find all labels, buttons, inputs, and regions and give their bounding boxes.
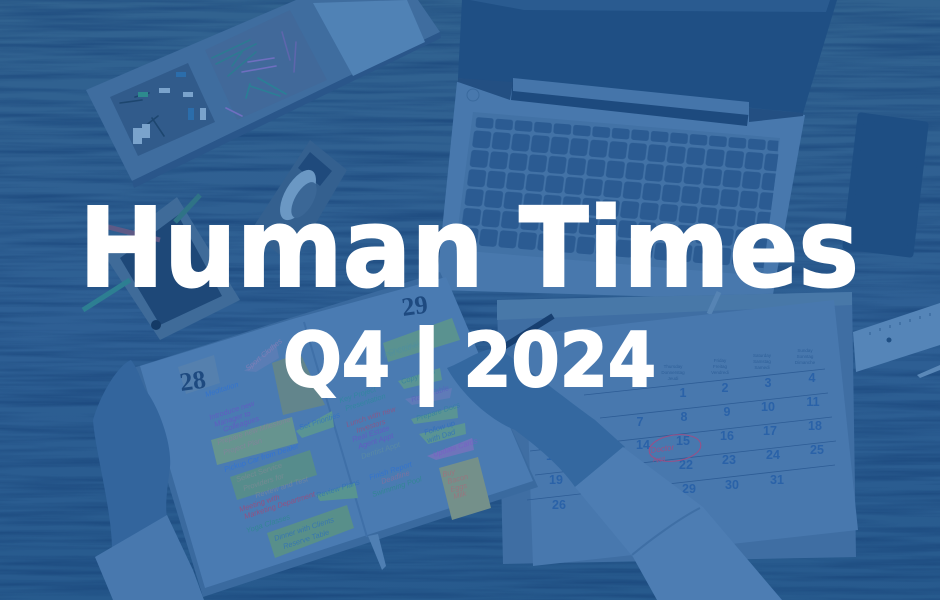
calendar backing pad [497,292,856,564]
calendar dates: 4 [809,371,816,385]
handwritten planner entries: Review Plans [315,477,361,500]
calendar dates: 11 [806,395,820,409]
handwritten planner entries: Chemical [387,339,420,357]
wall calendar page [525,300,858,566]
calendar weekday labels: Thursday [664,364,683,369]
subtitle: Q4 | 2024 [283,316,656,404]
laptop screen [458,0,837,113]
handwritten planner entries: Yoga Classes [245,512,291,535]
calendar weekday labels [661,348,816,381]
handwritten planner entries: Colleagues [222,414,261,434]
calendar weekday labels: Samedi [754,365,770,370]
handwritten planner entries: Meditation [204,380,240,399]
smartphone [846,116,925,254]
calendar dates: 2 [722,381,729,395]
pencils [83,280,130,310]
right hand with pen [447,316,625,487]
handwritten planner entries: Finish Report [368,459,414,482]
handwritten planner entries: Dinner with Clients [273,515,335,543]
calendar dates: 24 [766,448,780,462]
handwritten planner entries: Introduce new [208,399,256,422]
handwritten planner entries: Marketing Department [243,489,317,521]
calendar dates: 22 [679,458,693,472]
handwritten planner entries: with Dad [426,427,457,445]
handwritten planner entries: Update Cards [432,436,479,459]
handwritten planner entries: Real Estate [351,423,391,444]
handwritten planner entries: Investors [355,417,387,435]
calendar weekday labels: Donnerstag [661,370,685,375]
right shirt sleeve [575,447,782,600]
handwritten planner entries: Manager to [213,409,252,429]
calendar dates: 16 [720,429,734,443]
handwritten planner entries: Project Plan [222,436,263,457]
note paper in tray [313,0,425,76]
handwritten planner entries: Bacon [446,472,469,486]
calendar dates: 14 [636,438,650,452]
handwritten planner entries: Meeting with [238,492,281,514]
calendar dates: 23 [722,453,736,467]
laptop base [436,82,805,300]
calendar dates: 8 [681,410,688,424]
calendar dates: 17 [763,424,777,438]
handwritten planner entries: Review and Test [254,474,310,500]
pencil holder [83,195,240,340]
calendar weekday labels: Friday [714,358,727,363]
calendar dates [546,371,824,512]
calendar weekday labels: Jeudi [668,376,678,381]
handwritten planner entries: Sport Clothes [244,336,284,373]
handwritten planner entries: Dentist Appt [360,440,402,461]
open planner [133,272,538,597]
handwritten planner entries: Follow up [423,418,456,437]
keyboard keys [458,116,780,270]
calendar dates: 31 [770,473,784,487]
doctor appointment circle: Doctor [650,443,675,455]
handwritten planner entries [204,336,479,551]
calendar weekday labels: Sonntag [797,354,814,359]
calendar weekday labels: Saturday [753,353,772,358]
handwritten planner entries: Milk [452,488,469,501]
calendar dates: 3 [765,376,772,390]
calendar dates: 7 [637,415,644,429]
calendar dates: 10 [761,400,775,414]
handwritten planner entries: Raise Table [410,383,450,404]
planner date headings: 29 [400,290,430,322]
calendar dates: 18 [808,419,822,433]
handwritten planner entries: Swimming Pool [371,474,423,499]
calendar weekday labels: Sunday [797,348,813,353]
calendar dates: 12 [546,449,560,463]
calendar weekday labels: Freitag [713,364,727,369]
left hand holding planner [93,360,170,550]
calendar weekday labels: Vendredi [711,370,729,375]
calendar dates: 9 [724,405,731,419]
planner date headings: 28 [178,365,208,397]
pins and clips [120,32,296,136]
left shirt sleeve [95,515,204,600]
handwritten planner entries: Copy Files [400,366,437,386]
handwritten planner entries: Prepare new Milestone [216,415,292,447]
stationery tray with pins and paper clips [86,0,441,188]
calendar weekday labels: Samstag [753,359,771,364]
calendar dates: 25 [810,443,824,457]
handwritten planner entries: Prepare Docs [415,400,461,423]
bookmark ribbon [368,534,386,570]
handwritten planner entries: Set Priorities [298,410,341,432]
handwritten planner entries: Deadline [380,468,411,486]
handwritten planner entries: Key Project [338,384,378,405]
calendar dates: 15 [676,434,690,448]
handwritten planner entries: Buy [441,467,457,479]
handwritten planner entries: Agent Appt [356,431,396,451]
calendar dates: 1 [680,386,687,400]
handwritten planner entries: Reserve Table [282,527,330,551]
handwritten planner entries: Pickup Car from Dealer [223,441,300,474]
sticky notes [211,318,491,558]
laptop [436,0,837,300]
ruler [853,303,940,378]
tape dispenser [250,140,347,264]
handwritten planner entries: Pet Clothes [383,339,423,360]
calendar dates: 29 [682,482,696,496]
doctor appointment circle [647,432,703,464]
handwritten planner entries: Lunch with new [345,404,397,429]
planner date headings [178,290,430,397]
title: Human Times [79,184,859,312]
handwritten planner entries: Eggs [449,481,468,494]
doctor appointment circle: Appt [651,456,666,464]
handwritten planner entries: Select Service [235,461,283,484]
calendar dates: 30 [725,478,739,492]
handwritten planner entries: Presentation [344,391,387,413]
calendar weekday labels: Dimanche [795,360,816,365]
handwritten planner entries: Providers for [242,471,286,493]
calendar dates: 26 [552,498,566,512]
calendar dates: 19 [549,473,563,487]
